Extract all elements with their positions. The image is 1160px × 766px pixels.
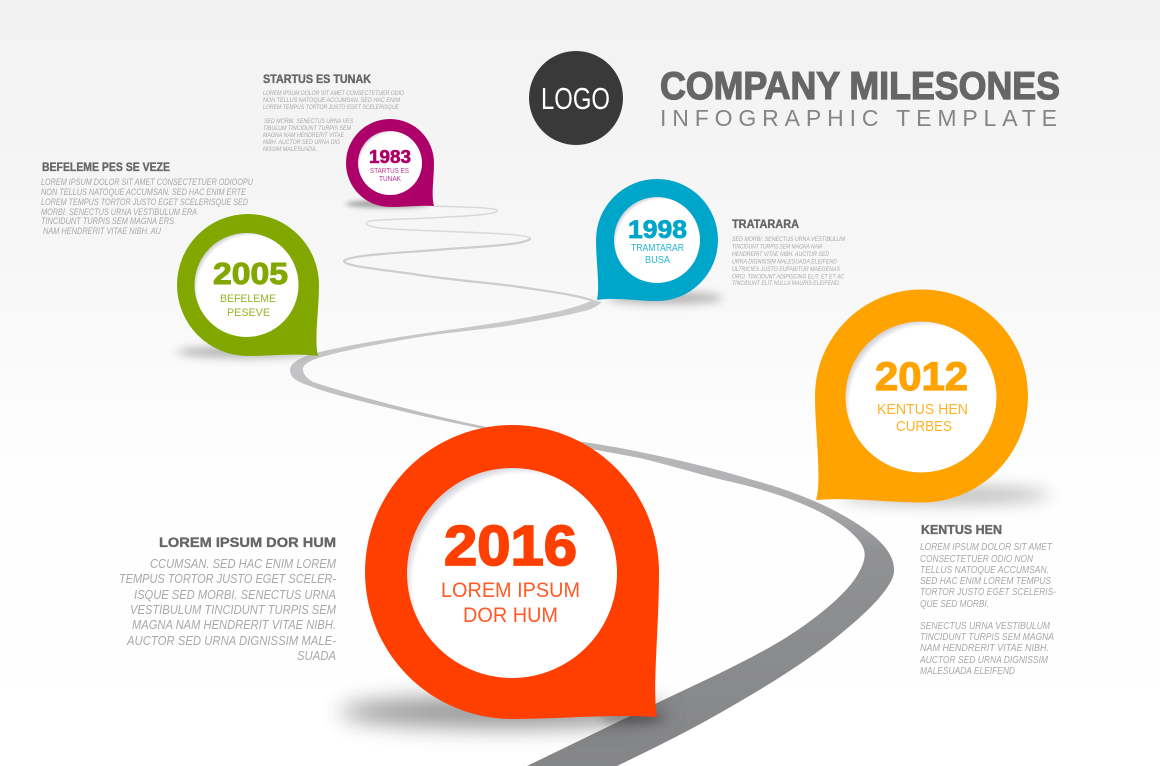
text block: lorem ipsum dor hum: AUCTOR SED URNA DIGNISSIM MALE- — [126, 634, 336, 648]
title: COMPANY MILESONES — [660, 65, 1060, 108]
text block: startus es tunak: NON TELLUS NATOQUE ACCUMSAN. SED HAC ENIM — [263, 97, 400, 104]
pin: 1998 — [596, 179, 723, 304]
text block: startus es tunak: MAGNA NAM HENDRERIT VITAE — [263, 132, 345, 139]
title — [660, 65, 1060, 131]
text block: startus es tunak: LOREM IPSUM DOLOR SIT AMET CONSECTETUER ODIO — [263, 90, 404, 97]
pin: 2005: 2005 — [213, 256, 288, 291]
text block: kentus hen: NAM HENDRERIT VITAE NIBH. — [920, 643, 1049, 654]
text block: tratarara: TINCIDUNT ELIT NULLA MAURIS ELEIFEND. — [732, 280, 840, 287]
text block: tratarara: TINCIDUNT TURPIS SEM MAGNA NAM — [732, 244, 822, 250]
text block: kentus hen: KENTUS HEN — [921, 523, 1002, 537]
text block: befeleme pes se veze: LOREM IPSUM DOLOR SIT AMET CONSECTETUER ODIOOPU — [41, 177, 253, 188]
text block: startus es tunak: STARTUS ES TUNAK — [263, 74, 372, 86]
text block: lorem ipsum dor hum: MAGNA NAM HENDRERIT VITAE NIBH. — [132, 618, 336, 632]
pin: 2012: 2012 — [875, 355, 968, 399]
text block: kentus hen: SENECTUS URNA VESTIBULUM — [920, 621, 1051, 632]
pin: 2012 — [815, 290, 1050, 504]
pin: 1983: STARTUS ES — [370, 166, 409, 175]
text block: lorem ipsum dor hum: TEMPUS TORTOR JUSTO EGET SCELER- — [119, 572, 336, 586]
text block: lorem ipsum dor hum: LOREM IPSUM DOR HUM — [159, 534, 336, 550]
text block: befeleme pes se veze: NON TELLUS NATOQUE ACCUMSAN. SED HAC ENIM ERTE — [41, 187, 247, 198]
text block: kentus hen: QUE SED MORBI. — [920, 599, 989, 610]
logo: LOGO — [541, 81, 610, 116]
pin: 2016 — [340, 425, 670, 728]
pin: 2016: LOREM IPSUM — [441, 579, 580, 602]
text block: kentus hen: TELLUS NATOQUE ACCUMSAN. — [920, 565, 1049, 576]
text block: kentus hen: AUCTOR SED URNA DIGNISSIM — [919, 655, 1049, 666]
pin: 1983: TUNAK — [379, 174, 401, 183]
text block: tratarara: URNA DIGNISSIM MALESUADA ELEIFEND — [732, 258, 837, 266]
text block: tratarara: HENDRERIT VITAE NIBH. AUCTOR SED — [732, 251, 829, 258]
text block: kentus hen: SED HAC ENIM LOREM TEMPUS — [920, 576, 1051, 587]
winding road — [290, 206, 894, 766]
pin: 2005 — [177, 214, 319, 358]
text block: kentus hen: LOREM IPSUM DOLOR SIT AMET — [920, 542, 1053, 553]
pin: 2016: 2016 — [444, 514, 577, 578]
text block: lorem ipsum dor hum: SUADA — [297, 649, 336, 663]
pin: 1983 — [346, 119, 434, 208]
subtitle: INFOGRAPHIC TEMPLATE — [660, 105, 1057, 131]
text block: tratarara: TRATARARA — [732, 219, 799, 231]
text block: startus es tunak: LOREM TEMPUS TORTOR JUSTO EGET SCELERISQUE — [263, 104, 400, 111]
text block: startus es tunak: NISSIM MALESUADA. — [263, 146, 317, 153]
text block: tratarara: SED MORBI. SENECTUS URNA VESTIBULUM — [732, 236, 845, 243]
text block: startus es tunak: TIBULUM TINCIDUNT TURPIS SEM — [263, 125, 351, 132]
text block: tratarara: ORCI. TINCIDUNT ADIPISCING ELIT, ET ET AC — [732, 274, 844, 280]
text block: befeleme pes se veze — [41, 160, 253, 237]
pin: 2016: DOR HUM — [463, 604, 558, 627]
text block: kentus hen: TINCIDUNT TURPIS SEM MAGNA — [920, 632, 1054, 643]
text block: befeleme pes se veze: BEFELEME PES SE VEZE — [42, 160, 170, 174]
text block: kentus hen: TORTOR JUSTO EGET SCELERIS- — [920, 587, 1057, 598]
text block: lorem ipsum dor hum: ISQUE SED MORBI. SENECTUS URNA — [134, 588, 336, 602]
text block: startus es tunak: NIBH. AUCTOR SED URNA DIG — [263, 139, 340, 146]
pin: 2005: PESEVE — [227, 307, 270, 319]
pin: 2012: CURBES — [896, 418, 952, 435]
logo — [529, 51, 623, 145]
text block: befeleme pes se veze: TINCIDUNT TURPIS SEM MAGNA ERS — [41, 216, 175, 227]
text block: lorem ipsum dor hum: VESTIBULUM TINCIDUNT TURPIS SEM — [130, 603, 337, 617]
pin: 1998: 1998 — [628, 216, 687, 244]
pin: 2005: BEFELEME — [220, 293, 276, 305]
pin: 1983: 1983 — [369, 147, 411, 167]
text block: kentus hen — [919, 523, 1057, 677]
text block: lorem ipsum dor hum: CCUMSAN. SED HAC ENIM LOREM — [150, 557, 337, 571]
pin: 1998: TRAMTARAR — [631, 243, 684, 254]
text block: befeleme pes se veze: LOREM TEMPUS TORTOR JUSTO EGET SCELERISQUE SED — [41, 197, 248, 208]
text block: kentus hen: CONSECTETUER ODIO NON — [920, 554, 1034, 565]
pin: 1998: BUSA — [645, 255, 670, 266]
text block: tratarara: ULTRICIES JUSTO EUFABITUR MAEGENAS — [732, 266, 841, 273]
text block: lorem ipsum dor hum — [119, 534, 337, 663]
text block: befeleme pes se veze: MORBI. SENECTUS URNA VESTIBULUM ERA — [41, 207, 197, 218]
text block: startus es tunak — [263, 74, 404, 153]
text block: kentus hen: MALESUADA ELEIFEND — [920, 666, 1015, 677]
text block: startus es tunak: SED MORBI. SENECTUS URNA VES — [264, 118, 354, 125]
text block: befeleme pes se veze: NAM HENDRERIT VITAE NIBH. AU — [43, 226, 161, 237]
text block: tratarara — [732, 219, 845, 287]
pin: 2012: KENTUS HEN — [877, 401, 968, 418]
